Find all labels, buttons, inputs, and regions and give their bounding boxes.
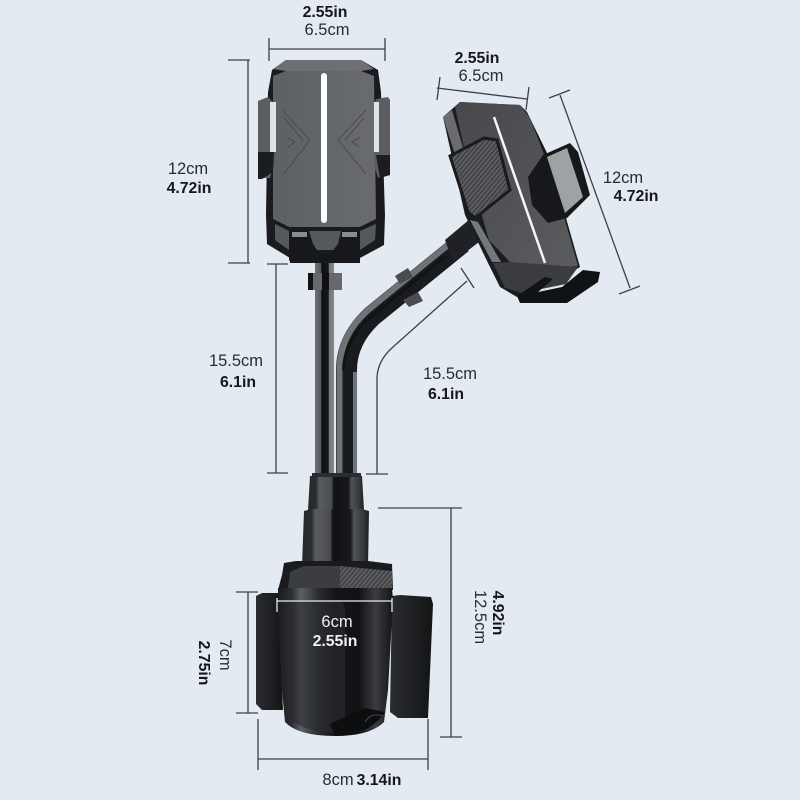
white light strip: [494, 117, 545, 263]
dimension: holder height, front view: 12cm: [168, 160, 208, 178]
right side grip: [374, 97, 390, 178]
phone holder: front view: [258, 60, 390, 263]
dimension: base total height: 12.5cm: [471, 590, 489, 644]
dimension: cup grip depth: [195, 592, 258, 713]
dimension: holder height, front view: 4.72in: [167, 180, 211, 197]
straight stem: [308, 263, 342, 477]
dimension: holder height, angled view: 12cm: [603, 169, 643, 187]
dimension: holder height, angled view: [549, 90, 658, 294]
cup holder base: [256, 561, 433, 736]
dimension: cup diameter: 2.55in: [313, 633, 357, 650]
dimension: upper width, angled view: [437, 50, 529, 110]
left side grip: [258, 97, 276, 178]
cup body: [278, 588, 393, 736]
dimension: base total height: [378, 508, 506, 737]
dimension: holder height, angled view: 4.72in: [614, 188, 658, 205]
right wing: [390, 595, 433, 718]
dimension: cup grip depth: 7cm: [216, 639, 234, 671]
dimension: straight stem length: 6.1in: [220, 374, 256, 391]
dimension: cup grip depth: 2.75in: [195, 641, 212, 685]
carbon side clamp: [450, 138, 510, 218]
dimension: cup diameter: [277, 598, 392, 650]
dimension: base total height: 4.92in: [489, 591, 506, 635]
dimension: curved stem length: [366, 268, 477, 474]
lower chin: [273, 219, 377, 231]
dimension: upper width, front view: 6.5cm: [305, 21, 349, 39]
chevron marks: [282, 110, 366, 174]
left wing: [256, 593, 283, 710]
dimension: upper width, front view: [269, 4, 385, 61]
dimension: holder height, front view: [167, 60, 250, 263]
top ring: [278, 561, 393, 590]
stem collar: [445, 219, 479, 262]
white light strip: [321, 73, 327, 223]
stem clips: [395, 268, 413, 284]
dimension: cup base width: [258, 719, 428, 789]
dimension: curved stem length: 6.1in: [428, 386, 464, 403]
dimension: cup base width: 3.14in: [357, 772, 401, 789]
dimension: cup base width: 8cm: [322, 771, 354, 789]
dimension: upper width, front view: 2.55in: [303, 4, 347, 21]
lower foot: [493, 262, 578, 293]
curved stem: [340, 219, 479, 477]
dimension: straight stem length: 15.5cm: [209, 352, 263, 370]
dimension: cup diameter: 6cm: [321, 613, 353, 631]
phone holder: angled view: [443, 102, 600, 303]
dimension: curved stem length: 15.5cm: [423, 365, 477, 383]
base collar and hex nut: [302, 473, 369, 566]
dimension: upper width, angled view: 6.5cm: [459, 67, 503, 85]
right grip pad: [528, 143, 590, 223]
dock clamp: [289, 231, 360, 263]
dimension: upper width, angled view: 2.55in: [455, 50, 499, 67]
dimension: straight stem length: [209, 264, 288, 473]
